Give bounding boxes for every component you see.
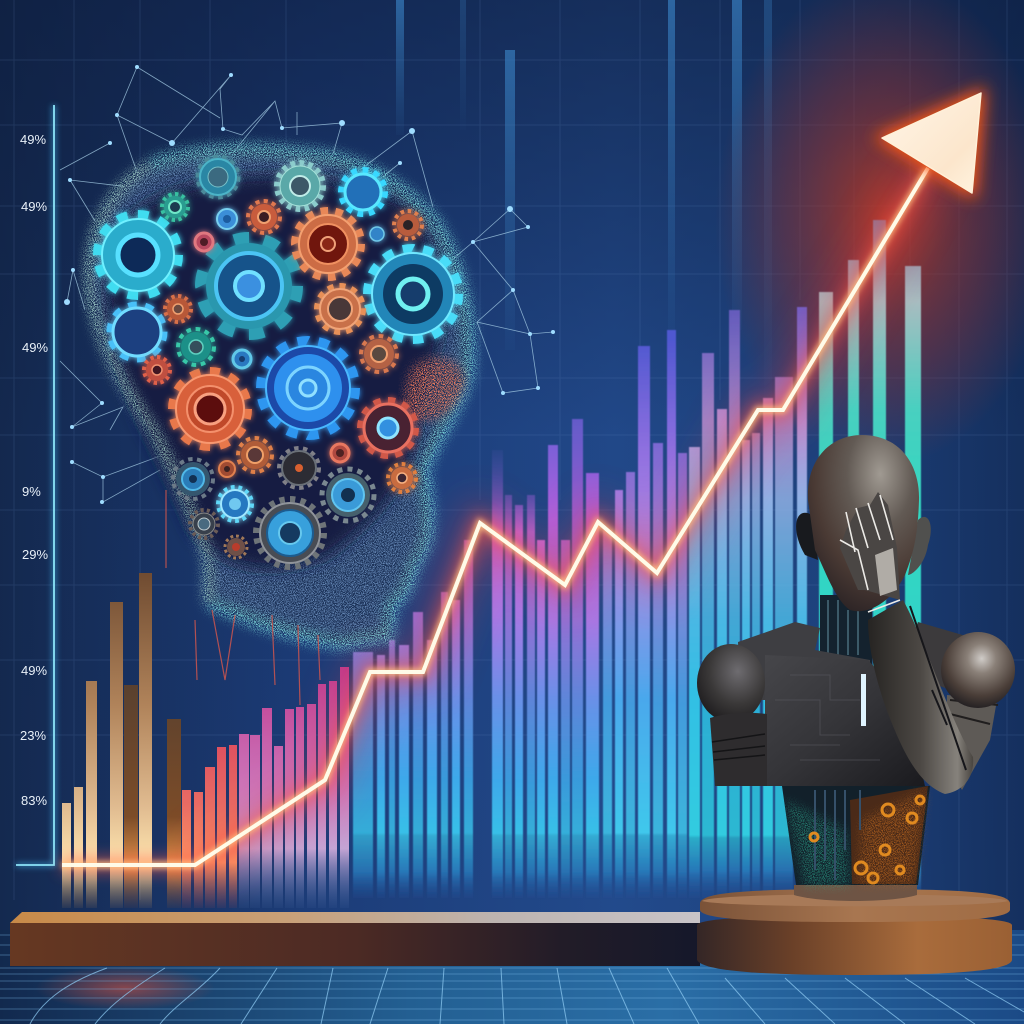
gear 24 (238, 438, 272, 472)
arrow fill (882, 93, 981, 193)
axis labels: 49% (21, 199, 47, 214)
dark zone behind gears (106, 175, 443, 569)
floor grid (0, 930, 1024, 1024)
forearm (868, 600, 973, 794)
head dust edge (150, 149, 469, 644)
axis labels: 83% (21, 793, 47, 808)
right shoulder (941, 632, 1015, 708)
robot (697, 435, 1015, 886)
robot head (808, 435, 919, 611)
bars: brown group (124, 685, 181, 908)
gear 7 (317, 286, 363, 332)
head dust fill (89, 149, 469, 644)
gear 33 (190, 510, 218, 538)
gear 5 (261, 341, 355, 435)
warm glow behind arrow (715, 0, 1024, 465)
axis glow (16, 105, 54, 865)
bars: soft purple tops group (492, 450, 570, 898)
gear 3 (368, 249, 458, 339)
gear 8 (110, 305, 164, 359)
left ear (796, 513, 818, 560)
round pedestal (697, 885, 1012, 975)
right ear (908, 517, 931, 575)
gear 11 (341, 170, 385, 214)
gear 23 (360, 400, 416, 456)
axis labels: 49% (21, 663, 47, 678)
axis labels: 49% (22, 340, 48, 355)
head silhouette (89, 149, 469, 705)
brain mesh patch (405, 358, 465, 420)
gear 22 (361, 336, 397, 372)
y axis (16, 105, 54, 865)
arrow head (882, 93, 981, 193)
bars: magenta group (239, 667, 349, 908)
axis labels: 29% (22, 547, 48, 562)
gear 15 (195, 233, 213, 251)
pedestal upper disc (700, 889, 1010, 922)
gear 9 (198, 157, 238, 197)
gear 10 (277, 163, 323, 209)
gear 28 (173, 459, 213, 499)
bar chart (62, 220, 921, 908)
bars: right group (689, 307, 807, 898)
gear 13 (217, 209, 237, 229)
head back dust edge (89, 165, 208, 602)
gear 34 (225, 536, 247, 558)
head base (89, 149, 469, 644)
trend line (62, 168, 928, 865)
wooden plinth (10, 912, 700, 966)
circuit core base (782, 786, 930, 886)
bars: tan group (62, 573, 152, 908)
gear cluster (98, 157, 458, 567)
axis labels: 49% (20, 132, 46, 147)
gear 2 (201, 238, 297, 334)
arrow glow (882, 93, 981, 193)
axis labels: 23% (20, 728, 46, 743)
trend glow (62, 168, 928, 865)
gear 4 (295, 211, 361, 277)
right upper arm (945, 695, 997, 790)
gear 32 (256, 499, 324, 567)
axis line (16, 105, 54, 865)
gear 29 (279, 448, 319, 488)
plinth front face (10, 923, 700, 966)
chest light (861, 674, 866, 726)
torso (765, 655, 925, 786)
network nodes (64, 65, 555, 504)
bars: lavender blue group (603, 330, 687, 898)
plinth top face (10, 912, 700, 923)
neck (820, 595, 872, 665)
gear 14 (248, 201, 280, 233)
gear 25 (331, 444, 349, 462)
trend halo (195, 168, 928, 865)
gear 30 (322, 469, 374, 521)
gear 17 (394, 211, 422, 239)
drips below head (166, 490, 320, 705)
upper torso shoulder panels (738, 622, 870, 700)
bars: red group (182, 745, 237, 908)
gear 31 (218, 487, 252, 521)
gear 16 (370, 227, 384, 241)
axis labels: 9% (22, 484, 41, 499)
pedestal lower disc (697, 916, 1012, 975)
gear 1 (98, 215, 178, 295)
bars: teal group (819, 220, 921, 898)
gear 27 (219, 461, 235, 477)
gear 26 (388, 464, 416, 492)
gear 18 (165, 296, 191, 322)
trend glow wide (62, 168, 928, 865)
trend core (62, 168, 928, 865)
gear 21 (233, 350, 251, 368)
bars: blue group (353, 419, 599, 898)
left upper arm (710, 713, 767, 786)
left shoulder (697, 644, 765, 722)
robot hand (840, 492, 900, 612)
axis labels (20, 132, 48, 808)
network lines (60, 65, 555, 504)
small base plate (794, 885, 917, 901)
gear 20 (144, 357, 170, 383)
gear 19 (178, 329, 214, 365)
gear 12 (162, 194, 188, 220)
faded vertical streaks (396, 0, 772, 400)
gear 6 (172, 371, 248, 447)
